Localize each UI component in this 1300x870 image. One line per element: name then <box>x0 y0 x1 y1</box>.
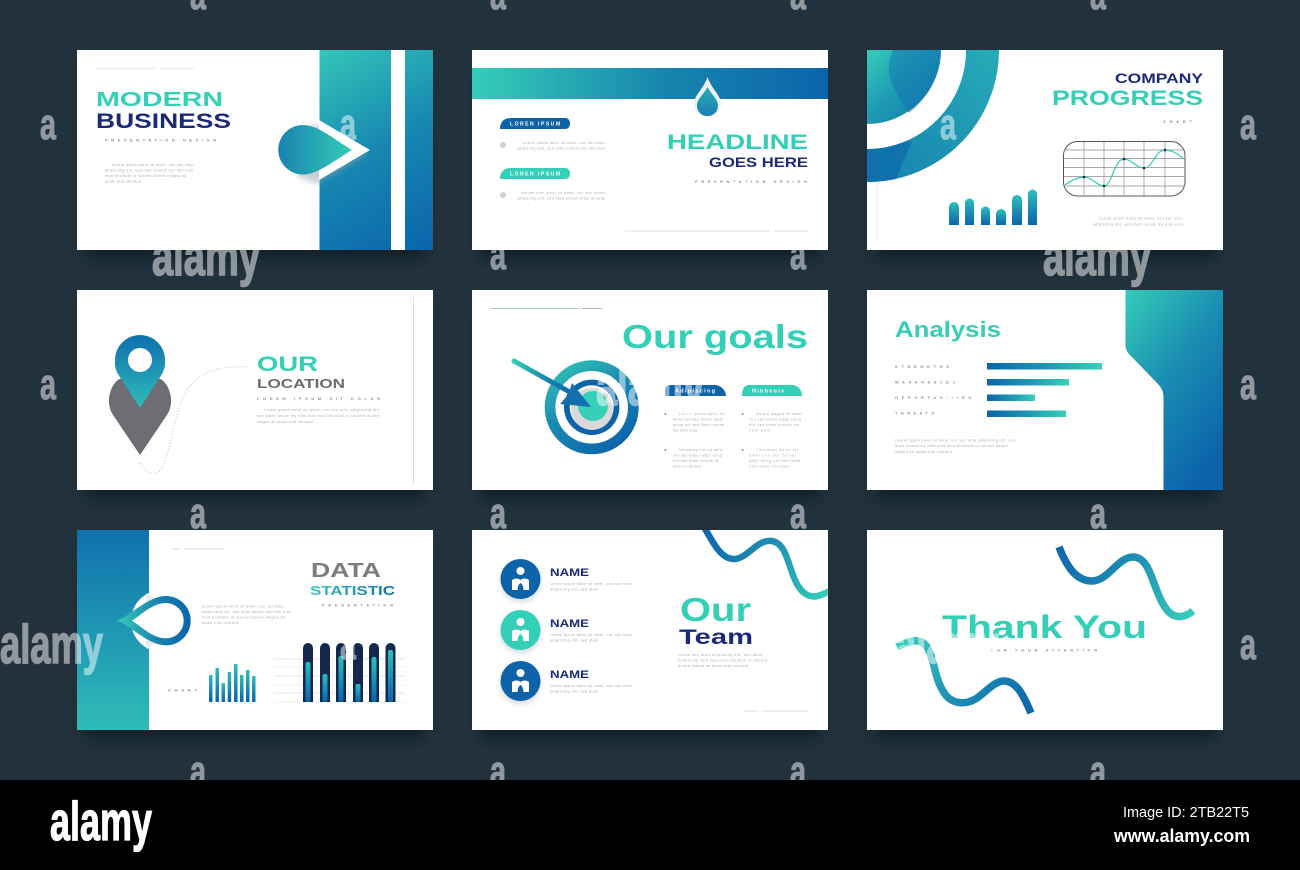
heading: HEADLINE <box>667 131 808 154</box>
body text: adipiscing elit, sed diam nonum my nibh euis <box>1093 222 1183 226</box>
text column one: my nibh euis <box>673 428 697 432</box>
watermark overlay: a <box>40 360 56 409</box>
watermark overlay: a <box>1090 747 1106 796</box>
text column two: Dolore magna sit amet <box>756 412 802 416</box>
panel: analysis <box>867 290 1223 490</box>
watermark overlay: a <box>490 230 506 279</box>
heading: Our <box>680 591 751 628</box>
text column two: elit sed diam nonum my <box>749 423 799 427</box>
subtitle: PRESENTATION <box>322 602 393 608</box>
label pill two <box>742 385 802 396</box>
body text: Lorem sec tetur adipiscing elit, sed diam <box>678 653 762 657</box>
watermark overlay: a <box>640 620 656 669</box>
text column one: con sec tetuer adipi scing <box>673 454 722 458</box>
heading: GOES HERE <box>709 154 808 170</box>
panel: our goals <box>472 290 828 490</box>
bar labels: OPPORTUNITIES <box>895 395 971 400</box>
decorative wave bottom <box>897 641 1031 713</box>
decorative wave top <box>1059 547 1193 617</box>
watermark overlay: a <box>490 747 506 796</box>
body text: quam erat volutpat <box>105 180 141 184</box>
team member three: adipiscing elit, sed diam <box>550 690 598 694</box>
body text: mod tincidunt ut laoreet dolore magna ali <box>202 616 285 620</box>
text block two: Nonum nibh dolor sit amet, con sec tetuer <box>521 191 606 195</box>
text block one <box>500 141 606 150</box>
body text <box>257 408 379 424</box>
watermark overlay: a <box>1240 360 1256 409</box>
text column one: amet con sec tetuer adipi <box>673 418 723 422</box>
text block one: adipiscing elit, sed diam nonum my nibh euis <box>517 146 605 150</box>
watermark overlay: a <box>940 360 956 409</box>
bar chart <box>949 190 1037 225</box>
bar labels: WEAKNESSES <box>895 380 955 384</box>
footer bar <box>0 780 1300 870</box>
label pill two <box>500 168 570 179</box>
icon: teal map pin <box>115 335 165 408</box>
subtitle: CHART <box>1163 119 1193 124</box>
label pill one <box>665 385 726 396</box>
team member two: adipiscing elit, sed diam <box>550 638 598 642</box>
heading: MODERN <box>96 89 223 111</box>
body text <box>202 604 291 625</box>
body text <box>678 653 767 668</box>
icon: teal drop arrow <box>278 120 370 184</box>
body text <box>895 438 1015 454</box>
decorative rings <box>867 50 999 182</box>
body text: nonum my nibh euis mod tincidunt ut laoreet <box>678 658 767 662</box>
text column two: nibh euis <box>749 428 770 432</box>
heading: DATA <box>311 560 381 582</box>
label pill two: Nibheuis <box>752 388 784 394</box>
small bar chart <box>168 664 256 702</box>
body text: magna ali quam erat volutpat <box>895 450 952 454</box>
bar labels <box>895 364 971 416</box>
heading: Our goals <box>622 318 808 355</box>
text block one: Lorem ipsum dolor sit amet, con sec tetur <box>523 141 606 145</box>
team member one: Lorem ipsum dolor sit amet, con sec tetur <box>550 582 633 586</box>
panel: our team <box>472 525 832 730</box>
text column one <box>664 412 725 468</box>
dotted route <box>140 367 248 474</box>
heading <box>667 131 808 170</box>
watermark overlay: alamy <box>1043 225 1151 287</box>
watermark overlay: a <box>1240 620 1256 669</box>
heading <box>679 591 753 649</box>
heading: COMPANY <box>1115 70 1204 86</box>
watermark overlay: a <box>340 100 356 149</box>
watermark overlay: alamy <box>896 613 999 675</box>
image id: Image ID: 2TB22T5 <box>1123 804 1249 821</box>
icon: drop ring <box>117 592 191 650</box>
watermark overlay: a <box>340 620 356 669</box>
watermark overlay: a <box>490 489 506 538</box>
horizontal bar chart <box>987 363 1102 417</box>
text column two: Tincidunt dolor sit <box>756 448 798 452</box>
body text: Lorem ipsum dolor sit amet, con sec tetur <box>112 163 195 167</box>
text column one: laoreet dolore <box>673 464 701 468</box>
body text: mod tincidunt ut laoreet dolore magna ali <box>105 174 186 178</box>
text block two: adipiscing elit, sed diam nonum amet aenean <box>517 196 605 200</box>
panel: headline <box>472 50 828 250</box>
heading: BUSINESS <box>96 110 231 133</box>
text column one: Lorem ipsum dolor sit <box>679 412 725 416</box>
body text <box>1093 216 1184 226</box>
team member one: NAME <box>550 567 589 579</box>
decorative wave <box>703 525 832 596</box>
heading <box>96 89 231 133</box>
watermark overlay: a <box>790 747 806 796</box>
pill bar chart <box>274 643 405 702</box>
body text: diam nonum my nibh euis mod tincidunt ut laoreet dolore <box>895 444 1008 448</box>
body text: Lorem ipsum dolor sit amet, con sec tetur adipiscing elit <box>264 408 379 412</box>
side shape <box>1126 290 1223 490</box>
watermark overlay: a <box>1090 489 1106 538</box>
text column one: elit sed diam nonum ut <box>673 459 718 463</box>
subtitle: PRESENTATION DESIGN <box>695 179 807 184</box>
team member three: NAME <box>550 669 589 681</box>
team member one <box>500 559 633 602</box>
body text: adipiscing elit, sed diam nonum my nibh euis <box>105 168 193 172</box>
heading <box>257 353 345 391</box>
panel: modern business <box>77 50 433 250</box>
panel: our location <box>77 290 433 490</box>
text block two <box>500 191 606 200</box>
body text <box>105 163 195 184</box>
watermark overlay: a <box>790 489 806 538</box>
body text: adipiscing elit, sed diam nonum my nibh euis <box>202 610 291 614</box>
panel: thank you <box>867 530 1223 730</box>
team member three: Lorem ipsum dolor sit amet, con sec tetur <box>550 684 633 688</box>
watermark overlay: a <box>190 489 206 538</box>
team member two: NAME <box>550 618 589 630</box>
body text: Lorem ipsum dolor sit amet, con sec tetur <box>202 604 285 608</box>
subtitle: PRESENTATION DESIGN <box>105 138 216 142</box>
bar labels: STRENGTHS <box>895 364 949 369</box>
panel: data statistic <box>77 530 433 730</box>
text column two <box>742 412 802 468</box>
watermark overlay: a <box>40 100 56 149</box>
top band <box>472 68 828 99</box>
text column two: amet con sec tetuer <box>749 454 797 458</box>
label pill two: LOREN IPSUM <box>510 172 560 178</box>
watermark overlay: alamy <box>0 613 103 675</box>
body text: dolore magna ali quam erat volutpat <box>678 664 748 668</box>
heading: Team <box>679 626 753 649</box>
watermark overlay: a <box>1240 100 1256 149</box>
team member one: adipiscing elit, sed diam <box>550 588 598 592</box>
heading: PROGRESS <box>1052 87 1203 110</box>
watermark overlay: a <box>190 747 206 796</box>
subtitle: LOREM IPSUM SIT DOLOR <box>257 396 380 401</box>
text column two: con sec tetuer adipi scing <box>749 418 801 422</box>
heading: STATISTIC <box>310 583 396 598</box>
label pill one: LOREN IPSUM <box>510 122 560 128</box>
watermark overlay: a <box>640 100 656 149</box>
footer logo: alamy <box>50 790 152 852</box>
body text: Lorem ipsum dolor sit amet, con sec tetur adipiscing elit, sed <box>895 438 1015 442</box>
watermark overlay: alamy <box>152 225 260 287</box>
text column one: Nonummy nisi sit amet <box>679 448 723 452</box>
icon: grey map pin <box>109 375 171 455</box>
body text: Lorem ipsum dolor sit amet, con sec tetur <box>1099 216 1184 220</box>
watermark overlay: alamy <box>596 355 704 417</box>
label pill one: Adipiscing <box>675 388 715 394</box>
heading: OUR <box>257 353 318 376</box>
side band <box>320 50 433 250</box>
heading <box>1052 70 1204 110</box>
body text: magna ali quam erat volutpat <box>257 420 313 424</box>
watermark overlay: a <box>940 100 956 149</box>
side band <box>77 530 149 730</box>
heading: Thank You <box>942 609 1147 645</box>
target <box>545 360 639 454</box>
icon: water drop <box>694 77 721 117</box>
watermark overlay: a <box>790 230 806 279</box>
subtitle: FOR YOUR ATTENTION <box>991 648 1097 652</box>
team member two <box>500 610 633 653</box>
small bar chart: CHART <box>168 688 198 692</box>
team member two: Lorem ipsum dolor sit amet, con sec tetur <box>550 633 633 637</box>
arrow <box>514 361 591 407</box>
team member three <box>500 661 633 704</box>
text column two: nonummy volutpat <box>749 464 789 468</box>
heading: LOCATION <box>257 376 345 391</box>
text column two: adipi scing elit sed diam <box>749 459 800 463</box>
body text: sed diam nonum my nibh euis mod tincidunt ut laoreet dolore <box>257 414 379 418</box>
label pill one <box>500 118 570 129</box>
body text: quam erat volutpat <box>202 621 239 625</box>
panel shadows <box>85 70 1215 738</box>
bar labels: THREATS <box>895 410 934 416</box>
text column one: scing elit sed diam nonum <box>673 423 724 427</box>
heading <box>310 560 396 598</box>
heading: Analysis <box>895 317 1001 342</box>
website: www.alamy.com <box>1113 826 1250 846</box>
line chart <box>1064 142 1185 196</box>
panel: company progress <box>867 50 1223 250</box>
